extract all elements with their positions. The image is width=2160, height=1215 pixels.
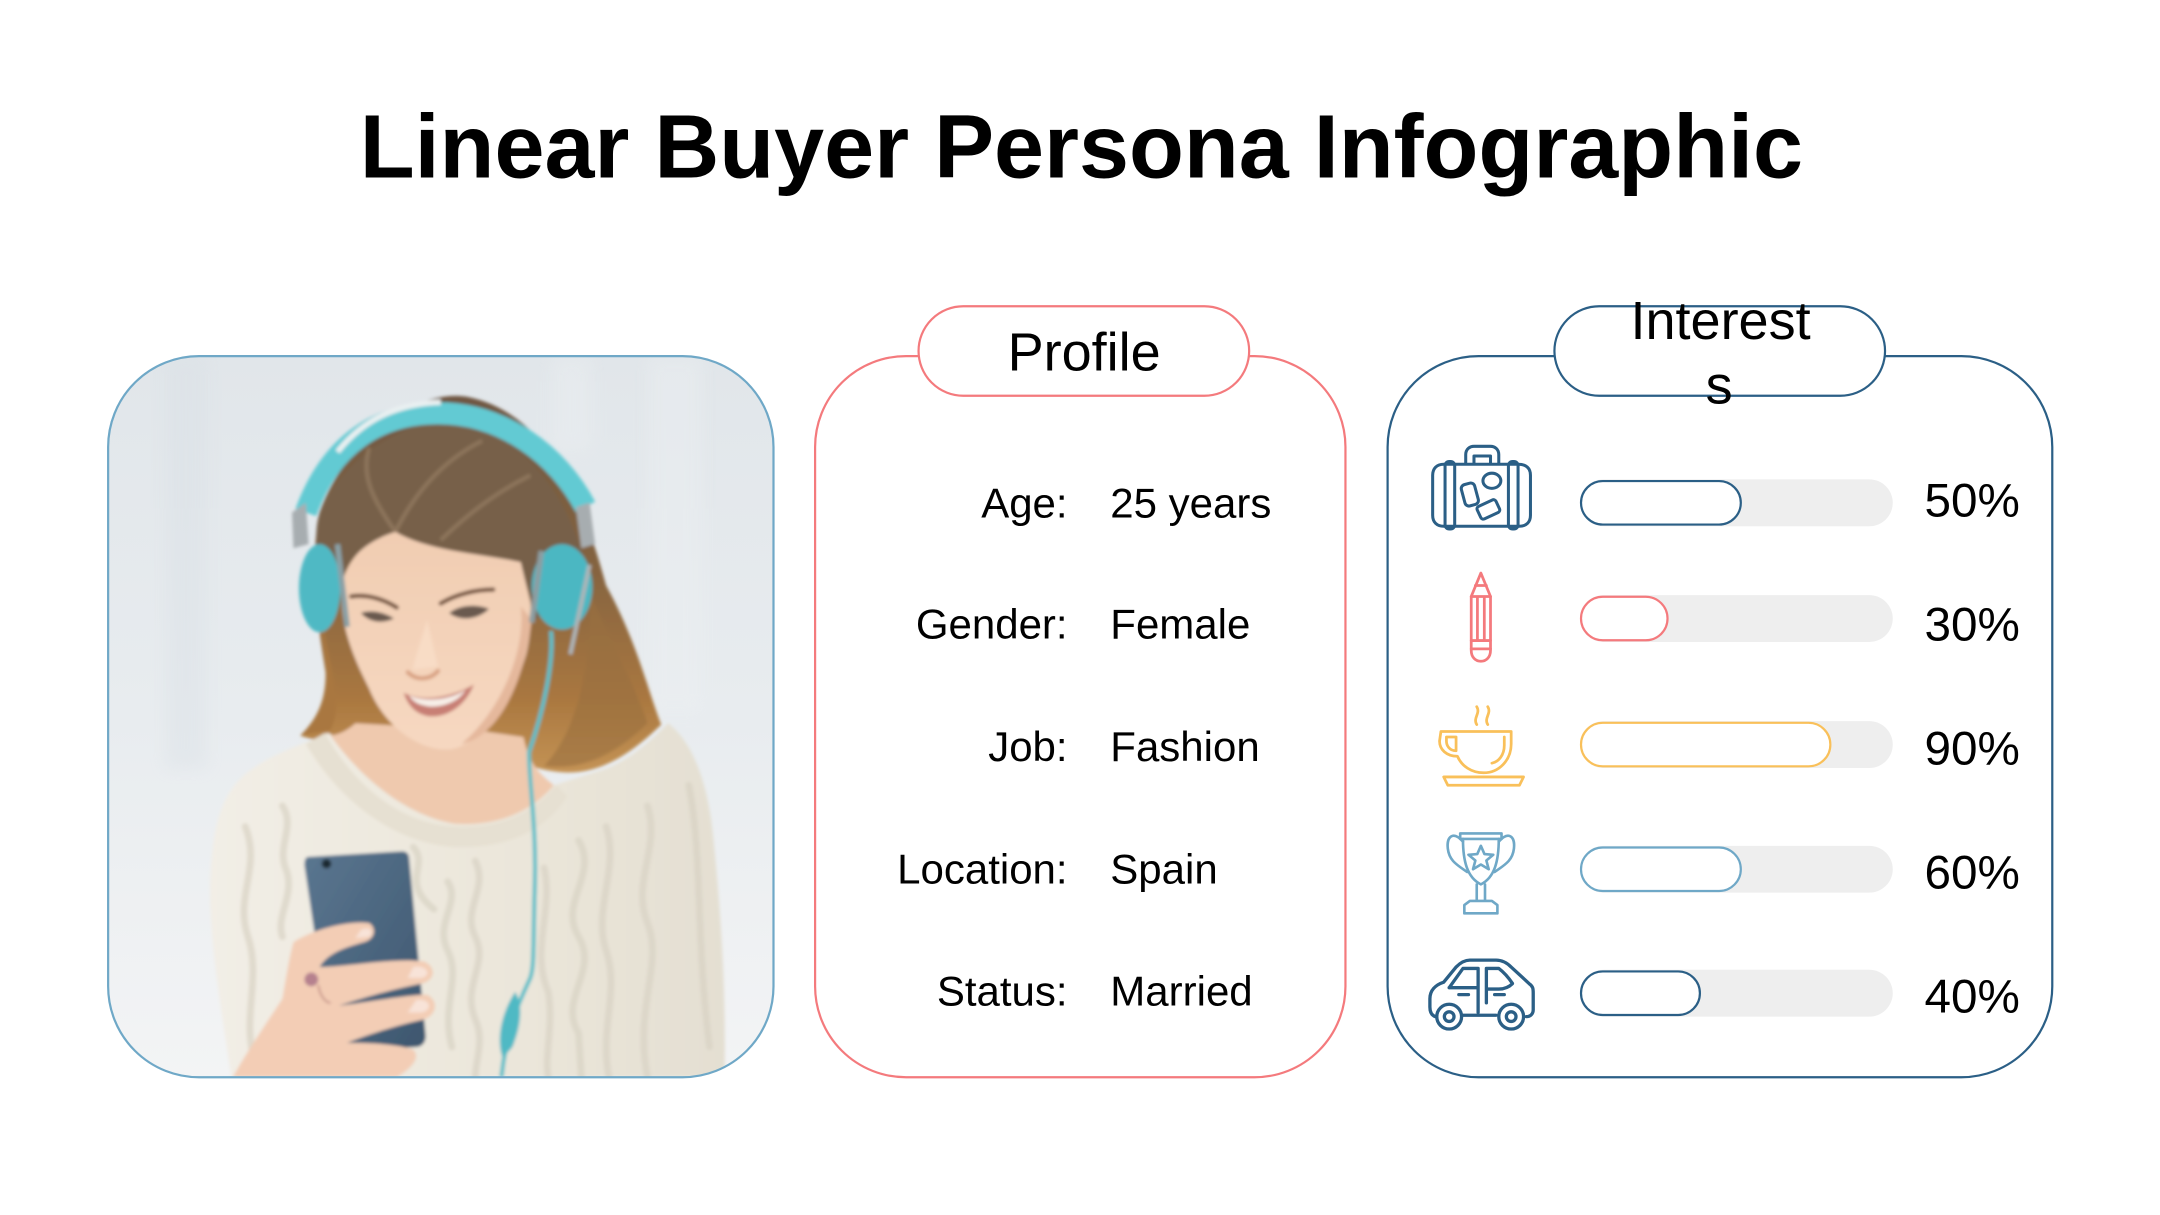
location: Spain bbox=[1110, 846, 1218, 893]
profile frame bbox=[815, 356, 1345, 1077]
progress: 40% bbox=[1580, 970, 2020, 1024]
status bbox=[937, 968, 1253, 1015]
icon: coffee cup bbox=[1440, 707, 1524, 785]
title: Linear Buyer Persona Infographic bbox=[360, 98, 1803, 198]
location bbox=[897, 846, 1218, 893]
ear cups bbox=[299, 544, 340, 632]
job bbox=[988, 723, 1260, 770]
progress: 50% bbox=[1580, 475, 2020, 528]
panel: photo of woman with headphones bbox=[107, 355, 774, 1077]
age bbox=[981, 479, 1271, 526]
gender: Gender: bbox=[916, 600, 1068, 647]
face shadow bbox=[461, 606, 532, 744]
profile heading pill bbox=[919, 306, 1249, 396]
cord bbox=[501, 631, 551, 1077]
progress: 60%: 60% bbox=[1924, 847, 2020, 900]
profile heading pill: Profile bbox=[1008, 323, 1161, 383]
hand bbox=[233, 923, 435, 1077]
eyes bbox=[361, 611, 394, 622]
status: Status: bbox=[937, 968, 1068, 1015]
progress: 30%: 30% bbox=[1924, 599, 2020, 652]
profile rows bbox=[897, 479, 1271, 1015]
collar bbox=[307, 731, 510, 846]
status: Married bbox=[1110, 968, 1253, 1015]
hair right strands bbox=[546, 688, 646, 768]
interests heading pill bbox=[1554, 291, 1885, 416]
mouth bbox=[404, 685, 474, 716]
interests frame bbox=[1388, 356, 2052, 1077]
gender bbox=[916, 600, 1250, 647]
icon: car bbox=[1430, 960, 1533, 1029]
progress: 40%: 40% bbox=[1924, 971, 2020, 1024]
icon: trophy bbox=[1448, 833, 1514, 913]
progress: 60% bbox=[1580, 846, 2020, 900]
interests heading pill: s bbox=[1706, 356, 1733, 416]
interests heading pill: Interest bbox=[1631, 291, 1811, 351]
hair left strands bbox=[300, 634, 332, 736]
hair over forehead bbox=[315, 440, 580, 618]
neck and chest bbox=[331, 723, 554, 824]
age: 25 years bbox=[1110, 479, 1271, 526]
job: Fashion bbox=[1110, 723, 1260, 770]
location: Location: bbox=[897, 846, 1068, 893]
brows bbox=[351, 596, 397, 608]
ring bbox=[304, 973, 318, 986]
progress: 90%: 90% bbox=[1924, 723, 2020, 776]
phone bbox=[304, 851, 426, 1051]
nose bbox=[408, 671, 438, 678]
headband bbox=[306, 413, 585, 512]
progress: 50%: 50% bbox=[1924, 475, 2020, 528]
face bbox=[341, 532, 531, 749]
icon: luggage bbox=[1433, 446, 1530, 529]
sweater bbox=[210, 723, 725, 1077]
icon: pencil bbox=[1471, 573, 1491, 661]
gender: Female bbox=[1110, 600, 1250, 647]
hair back bbox=[300, 396, 661, 772]
progress: 90% bbox=[1580, 721, 2020, 776]
job: Job: bbox=[988, 723, 1068, 770]
age: Age: bbox=[981, 479, 1068, 526]
panel: profile bbox=[815, 306, 1345, 1077]
cable knit bbox=[244, 785, 709, 1077]
panel: interests bbox=[1388, 291, 2052, 1077]
progress: 30% bbox=[1580, 595, 2020, 652]
